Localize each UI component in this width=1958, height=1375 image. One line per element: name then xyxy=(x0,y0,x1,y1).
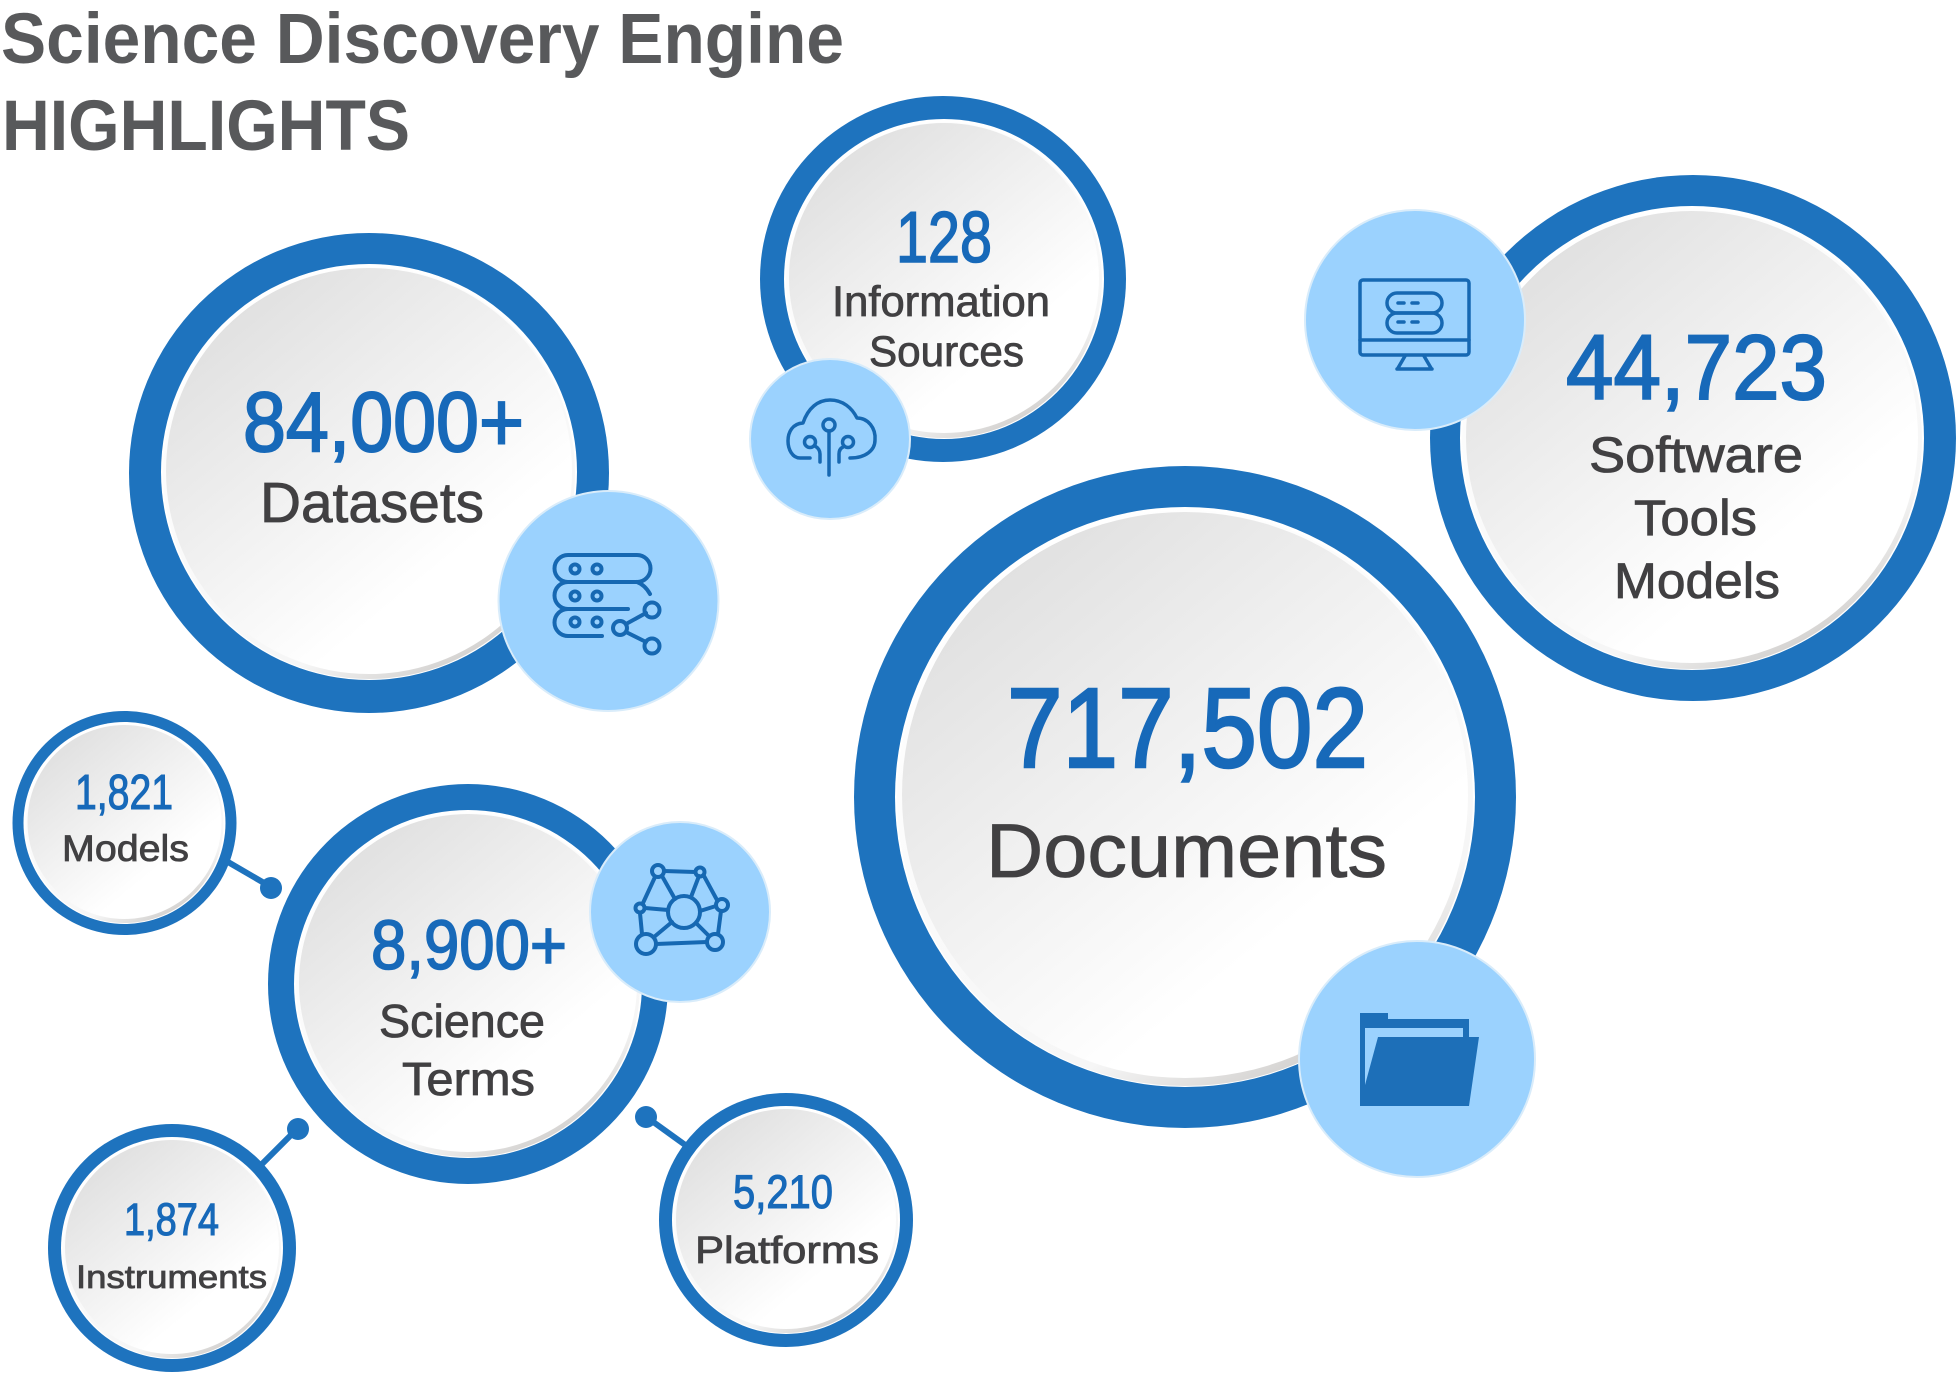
label: Software Tools Models: Models xyxy=(1614,553,1780,609)
label: Datasets: Datasets xyxy=(260,471,484,535)
label: Software Tools Models: Tools xyxy=(1634,490,1757,546)
connector: platforms xyxy=(635,1106,688,1147)
label: Science Terms: Terms xyxy=(402,1053,535,1105)
panel: instruments xyxy=(48,1124,296,1372)
panel: datasets xyxy=(129,233,718,713)
label: Models: Models xyxy=(62,828,189,869)
label: Science Terms xyxy=(379,995,545,1105)
stat: 128: 128 xyxy=(896,198,992,278)
stat: 8,900+: 8,900+ xyxy=(371,906,567,984)
stat: 44,723: 44,723 xyxy=(1566,317,1827,419)
label: Instruments: Instruments xyxy=(76,1259,267,1295)
panel: information sources xyxy=(750,96,1126,519)
connector: instruments xyxy=(261,1118,309,1165)
label: Platforms: Platforms xyxy=(695,1230,879,1272)
panel: platforms xyxy=(659,1093,913,1347)
label: Software Tools Models: Software xyxy=(1589,427,1803,483)
stat: 5,210: 5,210 xyxy=(733,1165,833,1218)
stat: 1,874: 1,874 xyxy=(124,1194,219,1245)
panel: software tools models xyxy=(1305,175,1956,701)
icon: cloud network xyxy=(750,359,910,519)
title: HIGHLIGHTS xyxy=(2,87,410,166)
stat: 717,502: 717,502 xyxy=(1007,665,1368,791)
icon: network xyxy=(590,822,770,1002)
icon: folder xyxy=(1299,941,1535,1177)
label: Software Tools Models xyxy=(1589,427,1803,609)
stat: 84,000+: 84,000+ xyxy=(243,375,524,469)
panel: models xyxy=(12,711,236,935)
connector: models xyxy=(228,862,282,899)
stat: 1,821: 1,821 xyxy=(75,766,173,820)
label: Documents: Documents xyxy=(986,809,1387,894)
icon: monitor server xyxy=(1305,210,1525,430)
icon: database share xyxy=(498,491,718,711)
title xyxy=(1,0,844,166)
panel: documents xyxy=(854,466,1535,1177)
label: Information Sources: Information xyxy=(832,278,1050,326)
label: Science Terms: Science xyxy=(379,995,545,1047)
title: Science Discovery Engine xyxy=(1,0,844,79)
label: Information Sources: Sources xyxy=(869,328,1024,376)
label: Information Sources xyxy=(832,278,1050,376)
panel: science terms xyxy=(268,784,770,1184)
